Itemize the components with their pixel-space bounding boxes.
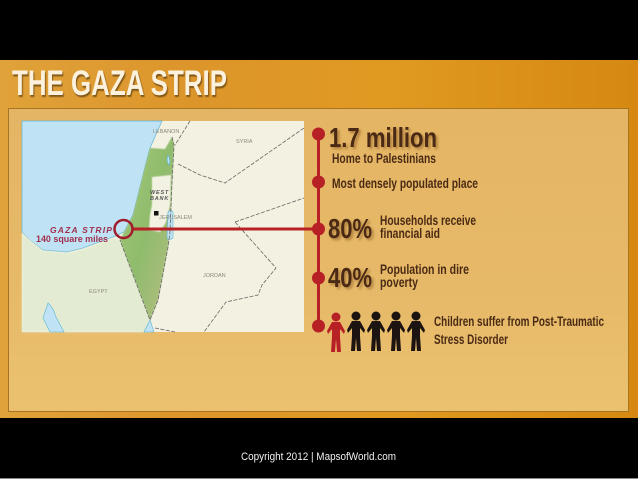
stats text shadows: 80% xyxy=(330,215,374,246)
stats text shadows xyxy=(330,124,439,295)
jerusalem marker xyxy=(154,211,158,216)
gaza label: GAZA STRIP xyxy=(50,225,113,235)
map: WEST xyxy=(150,190,169,196)
stats text xyxy=(328,122,604,347)
timeline with connector xyxy=(114,128,325,332)
stats text: poverty xyxy=(380,275,418,290)
map labels: SYRIA xyxy=(236,139,253,145)
map labels: JORDAN xyxy=(203,273,226,279)
panel background xyxy=(8,108,628,412)
gaza label: 140 square miles xyxy=(36,234,108,244)
stats text: Stress Disorder xyxy=(434,332,509,347)
gaza label xyxy=(36,225,113,244)
title: THE GAZA STRIP xyxy=(12,64,227,103)
stats text shadows: 1.7 million xyxy=(331,124,439,155)
header band xyxy=(0,60,638,418)
children icons xyxy=(327,312,425,352)
map labels: LEBANON xyxy=(153,129,179,135)
stats text: 1.7 million xyxy=(329,122,437,153)
borders xyxy=(120,121,304,332)
map xyxy=(22,121,304,332)
footer: Copyright 2012 | MapsofWorld.com xyxy=(241,451,396,463)
map labels xyxy=(89,129,253,295)
stats text shadows: 40% xyxy=(330,264,374,295)
bottom edge xyxy=(0,478,638,479)
west bank xyxy=(149,175,171,232)
water bodies xyxy=(43,155,173,332)
egypt land tint xyxy=(22,233,151,332)
map labels: JERUSALEM xyxy=(159,215,192,221)
stats text: Most densely populated place xyxy=(332,176,478,191)
stats text: 40% xyxy=(328,262,372,293)
sea xyxy=(22,121,162,252)
stats text: financial aid xyxy=(380,226,440,241)
map: BANK xyxy=(150,196,169,202)
israel land xyxy=(120,137,174,320)
stats text: 80% xyxy=(328,213,372,244)
title: THE GAZA STRIP xyxy=(13,66,228,105)
map labels: EGYPT xyxy=(89,289,108,295)
stats text: Households receive xyxy=(380,213,476,228)
stats text: Population in dire xyxy=(380,262,469,277)
stats text: Home to Palestinians xyxy=(332,151,436,166)
